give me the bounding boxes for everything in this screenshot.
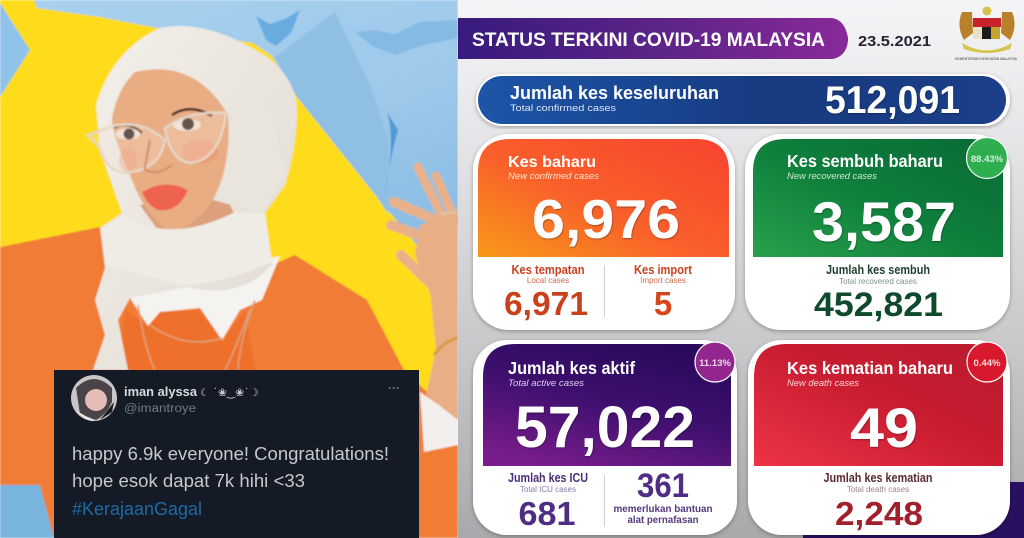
nose bbox=[145, 140, 172, 172]
header banner bbox=[458, 18, 848, 59]
glasses bbox=[88, 113, 226, 173]
percentage badge: 11.13% bbox=[699, 358, 731, 369]
face bbox=[112, 69, 229, 230]
ICU cases bbox=[508, 471, 588, 532]
total deaths bbox=[824, 471, 932, 532]
total recovered bbox=[814, 263, 943, 324]
author decoration: ☾ ˙❀‿❀˙☽ bbox=[200, 387, 259, 399]
total deaths: Total death cases bbox=[847, 485, 909, 494]
local cases: Local cases bbox=[527, 276, 569, 285]
heading: Kes sembuh baharu bbox=[787, 151, 943, 171]
scarf wrap bbox=[102, 212, 272, 285]
sublabel: Total confirmed cases bbox=[510, 103, 616, 114]
avatar bbox=[71, 375, 117, 421]
panel: active cases bbox=[473, 340, 737, 535]
total recovered: Total recovered cases bbox=[839, 277, 917, 286]
menu dots: ··· bbox=[388, 381, 400, 395]
total deaths: Jumlah kes kematian bbox=[824, 471, 932, 485]
import cases: 5 bbox=[654, 285, 672, 322]
heading: Kes baharu bbox=[508, 154, 596, 171]
subheading: New death cases bbox=[787, 378, 860, 388]
lips bbox=[142, 184, 188, 210]
import cases bbox=[634, 263, 693, 322]
ventilator cases: alat pernafasan bbox=[628, 515, 698, 526]
tweet handle: @imantroye bbox=[124, 403, 196, 415]
ventilator cases: 361 bbox=[637, 467, 689, 505]
ICU cases: 681 bbox=[518, 495, 576, 532]
import cases: Import cases bbox=[640, 276, 686, 285]
hijab shade bbox=[213, 100, 285, 213]
date: 23.5.2021 bbox=[858, 33, 931, 50]
white shirt cuff bbox=[420, 392, 458, 452]
forearm bbox=[426, 285, 458, 420]
cheek blush bbox=[182, 140, 218, 164]
subheading: Total active cases bbox=[508, 378, 585, 388]
label: Jumlah kes keseluruhan bbox=[510, 82, 719, 103]
shirt collar bbox=[130, 256, 280, 340]
panel: new deaths bbox=[748, 340, 1010, 535]
orange sweater bbox=[0, 227, 458, 538]
paper fold bbox=[275, 12, 388, 214]
torn blue paper, left bbox=[0, 3, 30, 97]
blue paper, lower left bbox=[0, 485, 54, 538]
panel: portrait photo bbox=[0, 0, 458, 538]
corner of dark panel bbox=[803, 482, 1024, 538]
percentage badge bbox=[966, 138, 1008, 178]
panel: statistics background bbox=[458, 0, 1024, 538]
watercolour stains on paper bbox=[256, 10, 300, 46]
right watercolour stain bbox=[355, 20, 458, 55]
local cases: Kes tempatan bbox=[512, 263, 584, 277]
icon: Malaysian coat of arms bbox=[955, 6, 1018, 61]
hijab bbox=[93, 26, 297, 370]
local cases bbox=[504, 263, 588, 322]
import cases: Kes import bbox=[634, 263, 693, 277]
panel: new cases bbox=[473, 134, 735, 330]
neck bbox=[140, 195, 235, 240]
left cheek blush bbox=[119, 148, 137, 172]
percentage badge: 88.43% bbox=[971, 154, 1004, 165]
value: 49 bbox=[850, 396, 918, 459]
ministry caption: KEMENTERIAN KESIHATAN MALAYSIA bbox=[955, 57, 1018, 61]
value: 512,091 bbox=[825, 79, 960, 122]
tweet text: happy 6.9k everyone! Congratulations! bbox=[72, 444, 389, 464]
value: 57,022 bbox=[515, 395, 695, 460]
tweet author: iman alyssa bbox=[124, 385, 198, 399]
tweet text: hope esok dapat 7k hihi <33 bbox=[72, 471, 305, 491]
ventilator cases bbox=[614, 467, 712, 526]
ring bbox=[442, 212, 456, 214]
panel: tweet bbox=[54, 370, 419, 538]
percentage badge: 0.44% bbox=[974, 358, 1001, 369]
vertical stain near hand bbox=[384, 112, 398, 197]
local cases: 6,971 bbox=[504, 285, 588, 322]
hand bbox=[391, 167, 456, 285]
total confirmed bar bbox=[476, 74, 1010, 126]
total recovered: Jumlah kes sembuh bbox=[826, 263, 930, 277]
heading: Kes kematian baharu bbox=[787, 358, 953, 378]
subheading: New confirmed cases bbox=[508, 171, 600, 181]
subheading: New recovered cases bbox=[787, 171, 878, 181]
ventilator cases: memerlukan bantuan bbox=[614, 504, 712, 515]
percentage badge bbox=[695, 342, 735, 382]
total deaths: 2,248 bbox=[835, 495, 923, 532]
eyes and brows bbox=[114, 109, 212, 140]
total recovered: 452,821 bbox=[814, 286, 943, 324]
inner orange top bbox=[120, 310, 255, 370]
hashtag: #KerajaanGagal bbox=[72, 499, 202, 519]
ICU cases: Total ICU cases bbox=[520, 485, 576, 494]
tweet text bbox=[72, 444, 389, 519]
value: 3,587 bbox=[812, 190, 956, 253]
torn blue paper, top bbox=[34, 0, 458, 270]
percentage badge bbox=[967, 342, 1007, 382]
necklace chains bbox=[138, 300, 255, 370]
palm bbox=[415, 210, 458, 300]
ICU cases: Jumlah kes ICU bbox=[508, 471, 588, 485]
value: 6,976 bbox=[532, 188, 680, 250]
panel: new recovered bbox=[745, 134, 1010, 330]
bracelet bbox=[434, 338, 458, 355]
heading: Jumlah kes aktif bbox=[508, 358, 635, 378]
title: STATUS TERKINI COVID-19 MALAYSIA bbox=[472, 30, 825, 51]
